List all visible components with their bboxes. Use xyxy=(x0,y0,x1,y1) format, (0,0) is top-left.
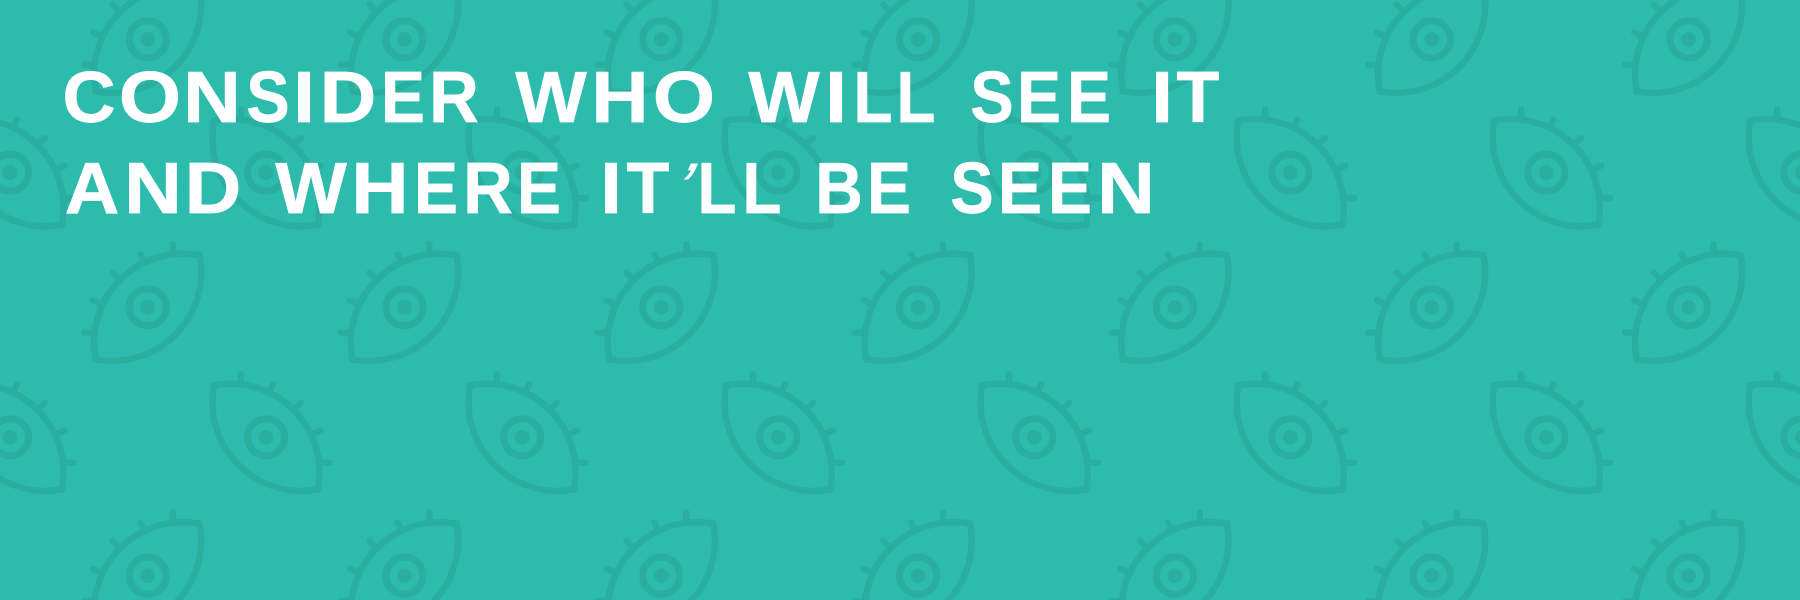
title line 2: B xyxy=(816,149,863,229)
title line 2: E xyxy=(867,149,911,229)
title line 1: D xyxy=(320,58,376,138)
title line 2: L xyxy=(742,149,781,229)
title line 1 xyxy=(62,58,1220,138)
title line 2: L xyxy=(697,149,736,229)
title line 2: T xyxy=(626,149,669,229)
title line 2: A xyxy=(65,149,119,229)
title line 1: W xyxy=(515,58,586,138)
title line 1: L xyxy=(897,58,936,138)
title line 2: S xyxy=(950,149,993,229)
title line 2: R xyxy=(463,149,513,229)
title line 2: W xyxy=(275,149,347,229)
title line 2: N xyxy=(124,149,181,229)
eye row 3 xyxy=(84,244,1742,361)
title line 1: L xyxy=(853,58,892,138)
title line 1: I xyxy=(825,58,847,138)
title line 1: O xyxy=(653,58,715,138)
title line 2: ’ xyxy=(657,149,709,229)
title line 1: I xyxy=(1151,58,1173,138)
title line 2 xyxy=(65,149,1155,229)
title line 1: H xyxy=(591,58,649,138)
title line 2: E xyxy=(414,149,458,229)
title line 2: D xyxy=(185,149,241,229)
title line 2: E xyxy=(517,149,561,229)
title line 1: O xyxy=(118,58,181,138)
title line 1: C xyxy=(62,58,115,138)
eye row 1 xyxy=(84,0,1742,93)
title line 1: I xyxy=(293,58,315,138)
title line 2: H xyxy=(351,149,409,229)
eye row 2 xyxy=(0,109,1800,226)
title line 1: E xyxy=(1017,58,1061,138)
title line 2: E xyxy=(1048,149,1092,229)
title line 1: E xyxy=(1067,58,1111,138)
title line 2: I xyxy=(600,149,622,229)
eye row 4 xyxy=(0,374,1800,491)
eye row 5 xyxy=(84,512,1742,600)
title line 1: T xyxy=(1177,58,1220,138)
title line 1: E xyxy=(381,58,425,138)
title line 2: E xyxy=(998,149,1042,229)
title line 1: S xyxy=(970,58,1013,138)
title line 1: N xyxy=(183,58,241,138)
title line 1: W xyxy=(748,58,819,138)
title line 1: S xyxy=(246,58,289,138)
title line 2: N xyxy=(1097,149,1155,229)
title line 1: R xyxy=(429,58,479,138)
